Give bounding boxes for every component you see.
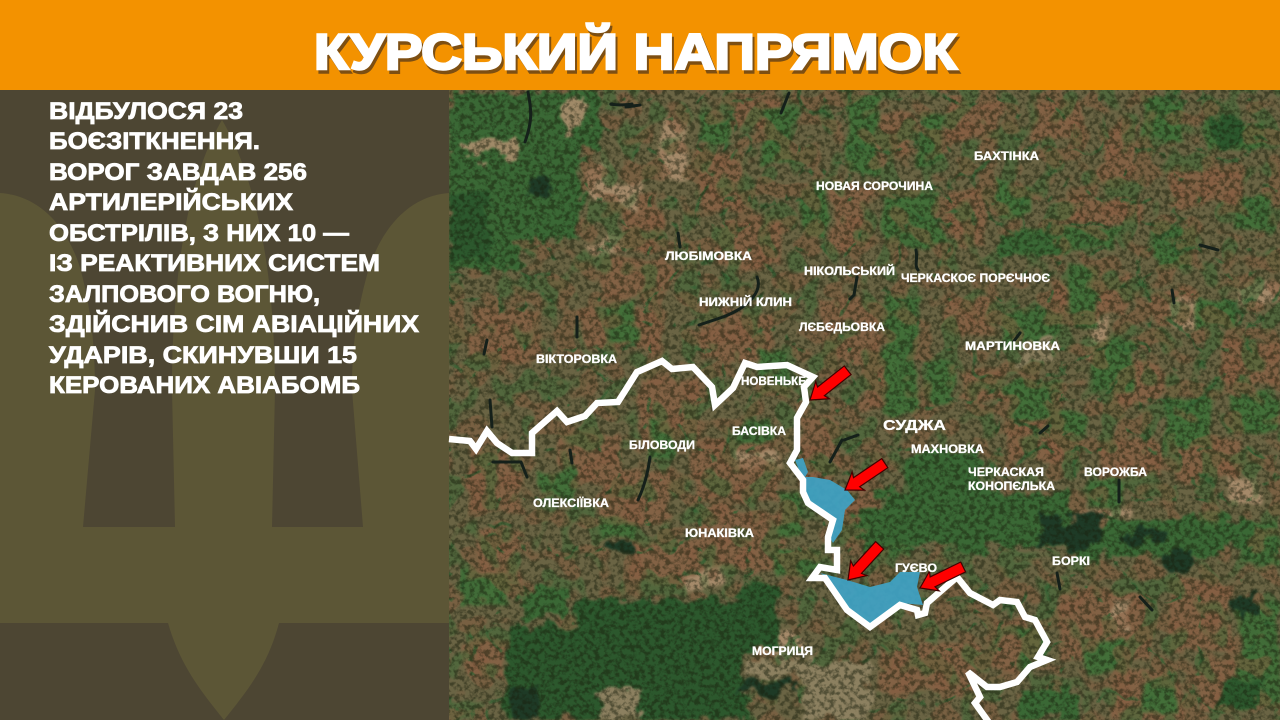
text block: combat summary: ОБСТРІЛІВ, З НИХ 10 — <box>49 220 349 247</box>
map labels: settlements: СУДЖА <box>883 417 946 434</box>
map labels: settlements: ЧЕРКАСКАЯ <box>968 465 1044 479</box>
map labels: settlements: МАХНОВКА <box>911 442 984 456</box>
map labels: settlements: ВІКТОРОВКА <box>536 352 617 366</box>
decorative vein and patch texture <box>449 90 1280 720</box>
decorative rivers <box>484 92 1218 610</box>
arrow: near Guyevo <box>915 557 968 598</box>
text block: combat summary: АРТИЛЕРІЙСЬКИХ <box>49 188 293 216</box>
icon: trident watermark <box>0 120 449 720</box>
map labels: settlements: НИЖНІЙ КЛИН <box>699 294 792 309</box>
text block: combat summary: ЗАЛПОВОГО ВОГНЮ, <box>49 281 320 308</box>
map labels: settlements: ЛЮБІМОВКА <box>665 249 752 263</box>
text block: combat summary: ЗДІЙСНИВ СІМ АВІАЦІЙНИХ <box>49 310 419 338</box>
map labels: settlements: ВОРОЖБА <box>1084 465 1147 479</box>
map labels: settlements: НІКОЛЬСЬКИЙ <box>804 263 895 278</box>
text block: combat summary: КЕРОВАНИХ АВІАБОМБ <box>49 372 360 399</box>
text block: combat summary: ВІДБУЛОСЯ 23 <box>49 98 243 125</box>
arrow: north blue zone <box>839 454 891 499</box>
panel: left text background <box>0 90 449 720</box>
map labels: settlements: КОНОПЄЛЬКА <box>968 479 1055 493</box>
occupied area: blue zones <box>795 458 923 625</box>
map labels: settlements <box>533 149 1147 658</box>
map labels: settlements: ЧЕРКАСКОЄ ПОРЄЧНОЄ <box>901 271 1050 285</box>
map labels: settlements: НОВЕНЬКЕ <box>741 374 806 388</box>
map: satellite imagery <box>449 90 1280 720</box>
text block: combat summary: ВОРОГ ЗАВДАВ 256 <box>49 159 307 186</box>
map labels: settlements: БАХТІНКА <box>974 149 1039 163</box>
map labels: settlements: БАСІВКА <box>732 424 786 438</box>
arrow: near Novenke <box>803 362 854 409</box>
arrows: red attack directions <box>803 362 968 598</box>
text block: combat summary: УДАРІВ, СКИНУВШИ 15 <box>49 342 357 369</box>
map labels: settlements: ГУЄВО <box>895 561 937 575</box>
header band <box>0 0 1280 90</box>
map labels: settlements: БІЛОВОДИ <box>629 438 695 452</box>
map labels: settlements: БОРКІ <box>1052 554 1090 568</box>
arrow: south blue zone <box>840 538 888 587</box>
text block: combat summary: БОЄЗІТКНЕННЯ. <box>49 128 260 155</box>
map labels: settlements: МАРТИНОВКА <box>965 339 1060 353</box>
text block: combat summary <box>49 98 419 399</box>
map labels: settlements: ЮНАКІВКА <box>685 526 754 540</box>
text block: combat summary: ІЗ РЕАКТИВНИХ СИСТЕМ <box>49 250 380 277</box>
map labels: settlements: МОГРИЦЯ <box>752 644 813 658</box>
border line <box>449 361 1047 720</box>
title: КУРСЬКИЙ НАПРЯМОК <box>316 26 960 84</box>
title: КУРСЬКИЙ НАПРЯМОК <box>314 23 958 80</box>
map labels: settlements: НОВАЯ СОРОЧИНА <box>816 179 933 193</box>
map labels: settlements: ОЛЕКСІЇВКА <box>533 495 609 510</box>
map labels: settlements: ЛЄБЄДЬОВКА <box>799 320 885 334</box>
